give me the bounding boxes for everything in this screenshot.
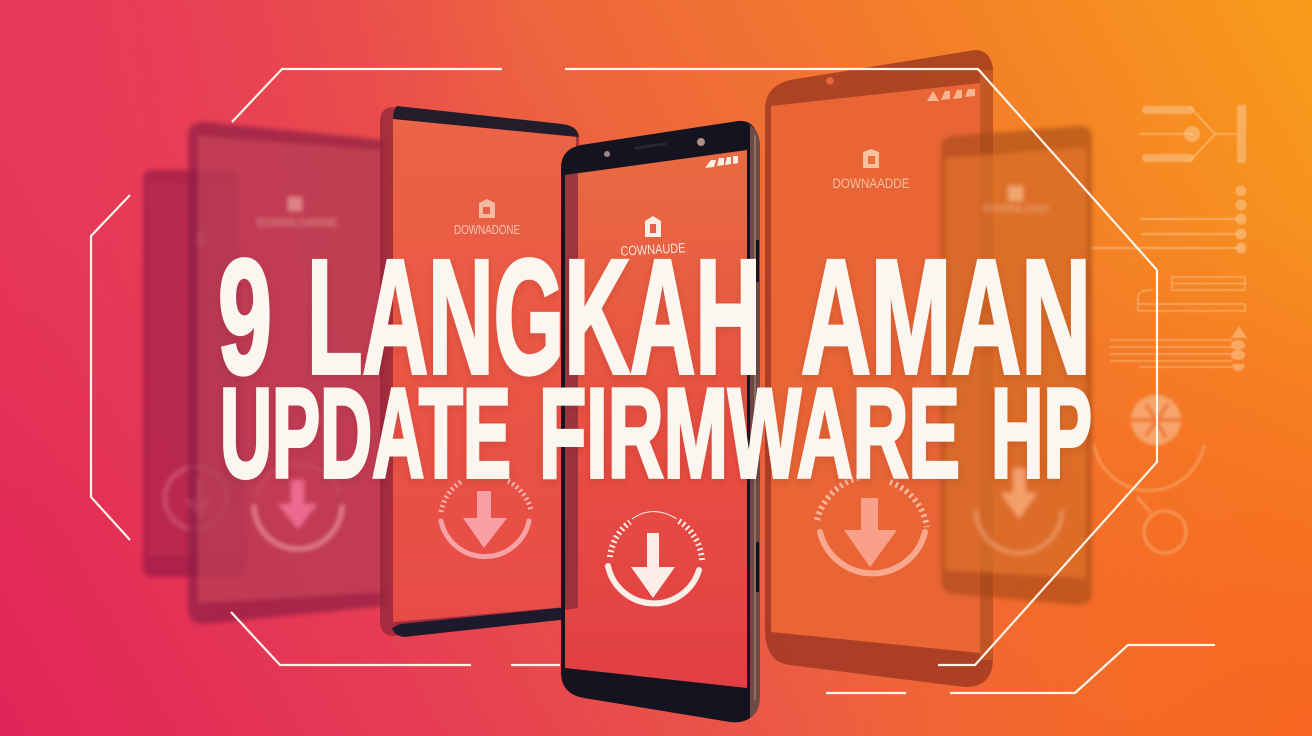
metal side band [748, 124, 760, 718]
side buttons [756, 240, 759, 592]
far left blurred phone [143, 170, 248, 577]
left phone frame [380, 107, 579, 636]
center phone body [561, 121, 760, 722]
cameras [604, 151, 610, 157]
center phone screen [565, 150, 747, 688]
label: DOWNAADDE [832, 176, 910, 191]
app icon [645, 216, 661, 237]
camera [826, 77, 834, 85]
right phone [765, 50, 993, 687]
status bars [927, 89, 975, 101]
icon: large faded ring and node [1094, 445, 1204, 553]
app icon [479, 199, 495, 218]
app icon [863, 149, 879, 168]
left blurred phone [188, 122, 385, 624]
title line 2: UPDATE [220, 362, 511, 504]
title [218, 225, 1092, 504]
title line 1: AMAN [801, 225, 1091, 408]
bottom bezel [392, 606, 578, 637]
far right blurred phone seen through right phone [941, 126, 1092, 605]
speaker [636, 144, 665, 148]
title line 2 [220, 362, 1092, 504]
icon: bars and dome [1138, 277, 1245, 311]
center phone [561, 121, 760, 722]
title line 1: LANGKAH [307, 225, 761, 408]
icon: orange gear emblem [1131, 395, 1181, 445]
right phone body [765, 50, 993, 687]
far right faint tech icons [1090, 105, 1247, 371]
right phone screen [771, 83, 980, 653]
decorative outline frame [91, 69, 1215, 693]
left translucent overlap on screen [565, 173, 578, 610]
download symbol [441, 481, 531, 557]
title line 1: 9 [218, 225, 272, 408]
left phone [380, 106, 579, 637]
left blurred phone: DOWNLOADNE [257, 217, 337, 229]
left phone screen [393, 119, 576, 622]
top bezel [393, 106, 579, 137]
download symbol [817, 478, 927, 573]
icon: dotted signal lines [1090, 186, 1246, 254]
far right blurred phone seen through right phone: DOWNLOAD [984, 203, 1048, 215]
label: DOWNADONE [454, 222, 520, 237]
icon: circuit connector [1140, 105, 1246, 163]
icon: stacked lines and markers [1110, 326, 1247, 371]
title line 2: HP [991, 362, 1092, 504]
status bars [705, 156, 738, 168]
label: COWNAUDE [620, 240, 686, 259]
download symbol [608, 512, 702, 603]
title line 2: FIRMWARE [539, 362, 960, 504]
